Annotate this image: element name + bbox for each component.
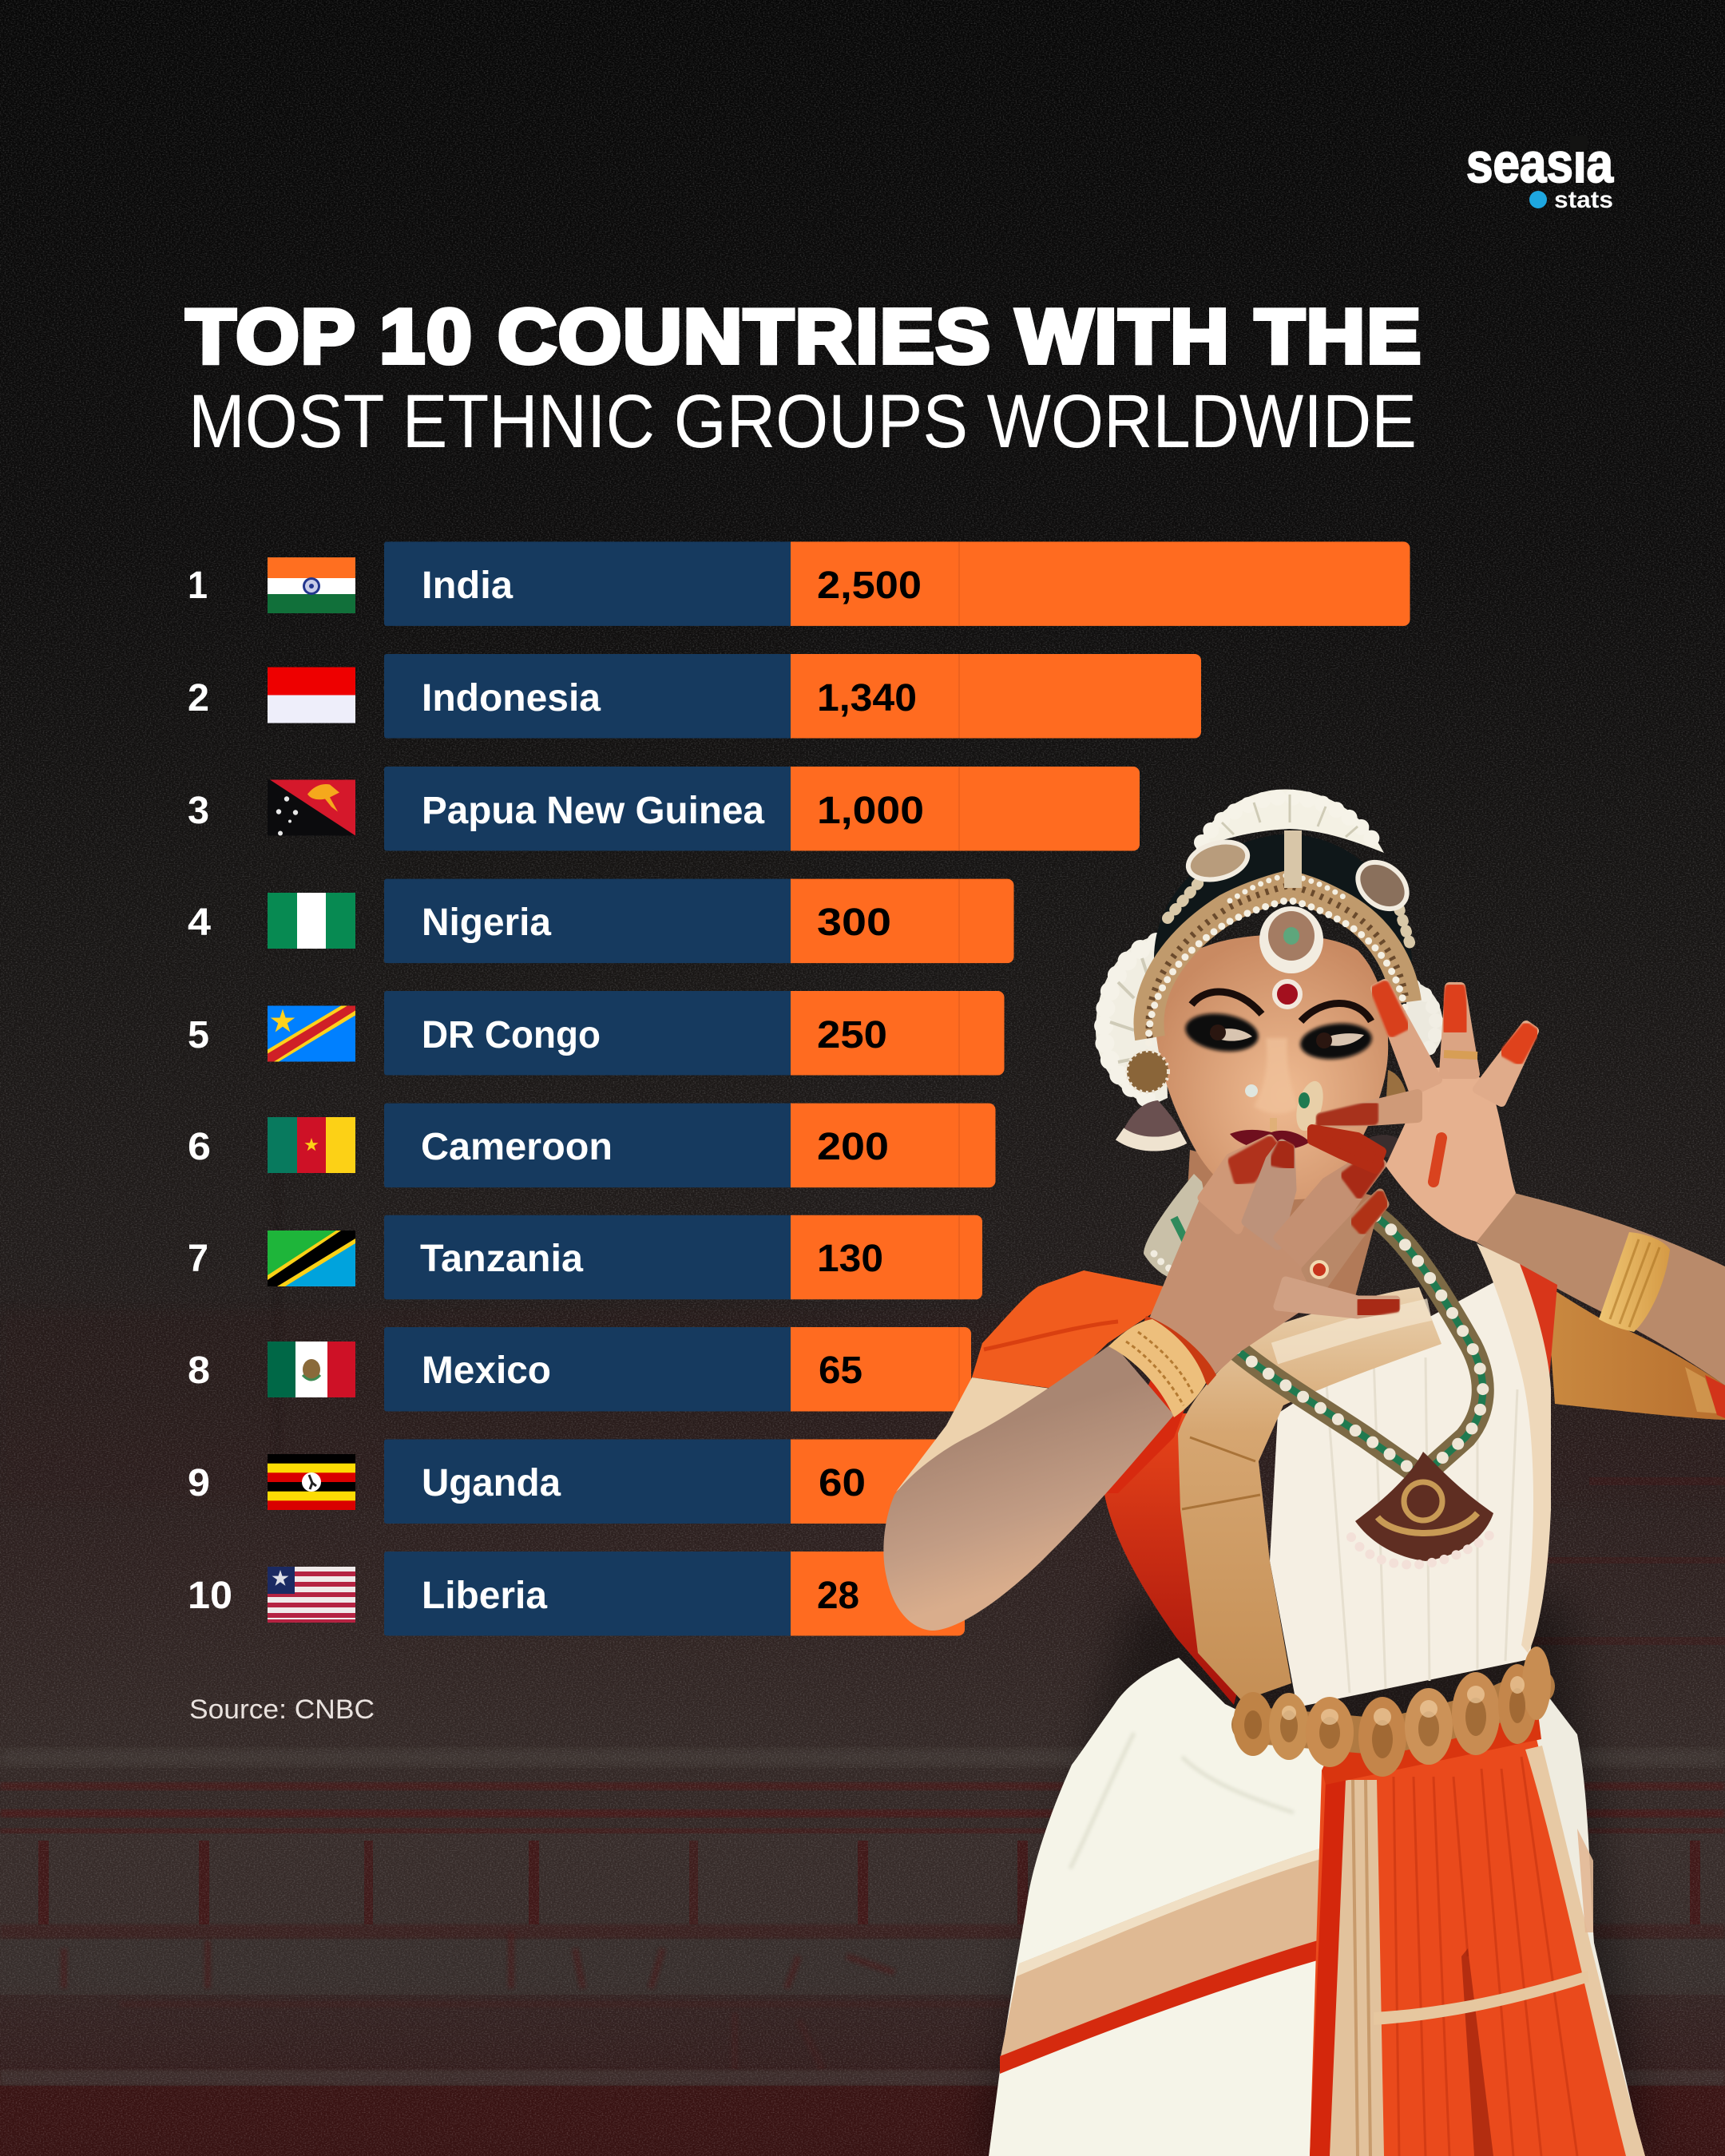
row 9: Uganda: 9 (188, 1462, 210, 1504)
ring (1311, 1262, 1327, 1278)
row 3: Papua New Guinea: 1,000 (817, 790, 924, 832)
forehead ornament (1184, 830, 1416, 973)
row 1: India: India (422, 565, 513, 607)
hair (1150, 834, 1412, 1006)
row 6: Cameroon: Cameroon (421, 1126, 613, 1168)
row 7: Tanzania: 130 (817, 1238, 883, 1280)
fingers with red alta (1202, 1139, 1396, 1314)
head (1096, 789, 1443, 1202)
row 4: Nigeria: Nigeria (422, 902, 551, 944)
bindi (1275, 981, 1300, 1007)
necklace pendant (1351, 1452, 1497, 1565)
row 4: Nigeria: 300 (817, 902, 891, 944)
row 9: Uganda: Uganda (422, 1462, 561, 1504)
nose stud and nose ring (1245, 1078, 1328, 1135)
top flowers (1196, 789, 1384, 853)
short necklace (1144, 1174, 1205, 1281)
long temple necklace (1235, 1216, 1497, 1565)
row 2: Indonesia (188, 654, 1201, 738)
white bodice (1270, 1270, 1551, 1707)
flag: Mexico (268, 1342, 355, 1397)
neck (1182, 1150, 1382, 1318)
flag: Uganda (268, 1454, 355, 1510)
flag: Indonesia (268, 668, 355, 723)
fingers with red alta (1312, 984, 1534, 1169)
red blouse (1104, 1264, 1557, 1705)
logo: seasia stats: seasia (1466, 132, 1614, 194)
flag: DR Congo (268, 1006, 355, 1062)
row 10: Liberia (188, 1552, 965, 1635)
row 9: Uganda: 60 (819, 1462, 866, 1504)
jewelled waist belt (1233, 1647, 1551, 1785)
earrings (1120, 1051, 1408, 1158)
row 1: India (188, 541, 1410, 626)
row 6: Cameroon: 200 (817, 1126, 889, 1168)
row 2: Indonesia: 2 (188, 677, 209, 719)
row 5: DR Congo: DR Congo (422, 1014, 601, 1056)
far hand with mudra (1312, 984, 1534, 1242)
pleated orange front panel (1310, 1739, 1645, 2156)
row 6: Cameroon (188, 1104, 995, 1187)
row 2: Indonesia: 1,340 (817, 677, 917, 719)
row 8: Mexico (188, 1327, 971, 1412)
dancer far forearm and sleeve (1469, 1190, 1725, 1420)
faint architecture bands (0, 1118, 1725, 2156)
soft shadow behind the dancer (974, 1597, 1645, 2156)
row 5: DR Congo: 5 (188, 1014, 209, 1056)
row 9: Uganda (188, 1439, 966, 1524)
ring (1444, 1054, 1477, 1056)
row 8: Mexico: 8 (188, 1349, 210, 1392)
row 2: Indonesia: Indonesia (422, 677, 601, 719)
ranked bar chart (188, 541, 1410, 1635)
nose shading (1254, 1038, 1298, 1113)
row 10: Liberia: 10 (188, 1575, 232, 1617)
flag: Cameroon (268, 1117, 355, 1173)
cream sleeve (896, 1377, 1057, 1492)
lips (1230, 1130, 1310, 1150)
flag: Nigeria (268, 893, 355, 949)
row 3: Papua New Guinea (188, 767, 1140, 851)
eyes and brows (1183, 992, 1374, 1063)
white skirt (989, 1658, 1644, 2156)
flag: Papua New Guinea (268, 779, 355, 835)
gold saree drape (1178, 1243, 1551, 1701)
row 1: India: 1 (188, 565, 208, 607)
title (186, 293, 1422, 464)
row 3: Papua New Guinea: 3 (188, 790, 209, 832)
source note: Source: CNBC (189, 1694, 375, 1725)
illustration: Bharatanatyam dancer (883, 789, 1725, 2156)
row 10: Liberia: 28 (817, 1575, 859, 1617)
pleat lines (1394, 1757, 1577, 2156)
title line 2: MOST ETHNIC GROUPS WORLDWIDE (188, 379, 1417, 464)
row 8: Mexico: Mexico (422, 1349, 551, 1392)
near wrist bangle (1108, 1316, 1216, 1417)
near hand (1152, 1139, 1396, 1380)
row 7: Tanzania (188, 1215, 982, 1299)
logo: seasia stats: stats (1554, 187, 1613, 213)
face (1155, 935, 1388, 1202)
row 1: India: 2,500 (817, 565, 922, 607)
flag: Liberia (268, 1567, 355, 1623)
flag: Tanzania (268, 1231, 355, 1286)
logo: seasia stats (1466, 132, 1614, 213)
side flowers (1096, 936, 1443, 1106)
row 5: DR Congo: 250 (817, 1014, 887, 1056)
flag: India (268, 557, 355, 613)
row 7: Tanzania: Tanzania (420, 1238, 583, 1280)
row 8: Mexico: 65 (819, 1349, 862, 1392)
row 4: Nigeria (188, 879, 1014, 963)
row 7: Tanzania: 7 (188, 1238, 208, 1280)
orange shoulder drape (972, 1270, 1198, 1493)
skirt gold border (1000, 1846, 1327, 2060)
title line 1: TOP 10 COUNTRIES WITH THE (186, 293, 1422, 378)
row 3: Papua New Guinea: Papua New Guinea (422, 790, 764, 832)
near arm (883, 1343, 1174, 1631)
row 6: Cameroon: 6 (188, 1126, 211, 1168)
row 4: Nigeria: 4 (188, 902, 211, 944)
row 10: Liberia: Liberia (422, 1575, 547, 1617)
row 5: DR Congo (188, 991, 1005, 1075)
head jewellery band (1148, 874, 1412, 1052)
